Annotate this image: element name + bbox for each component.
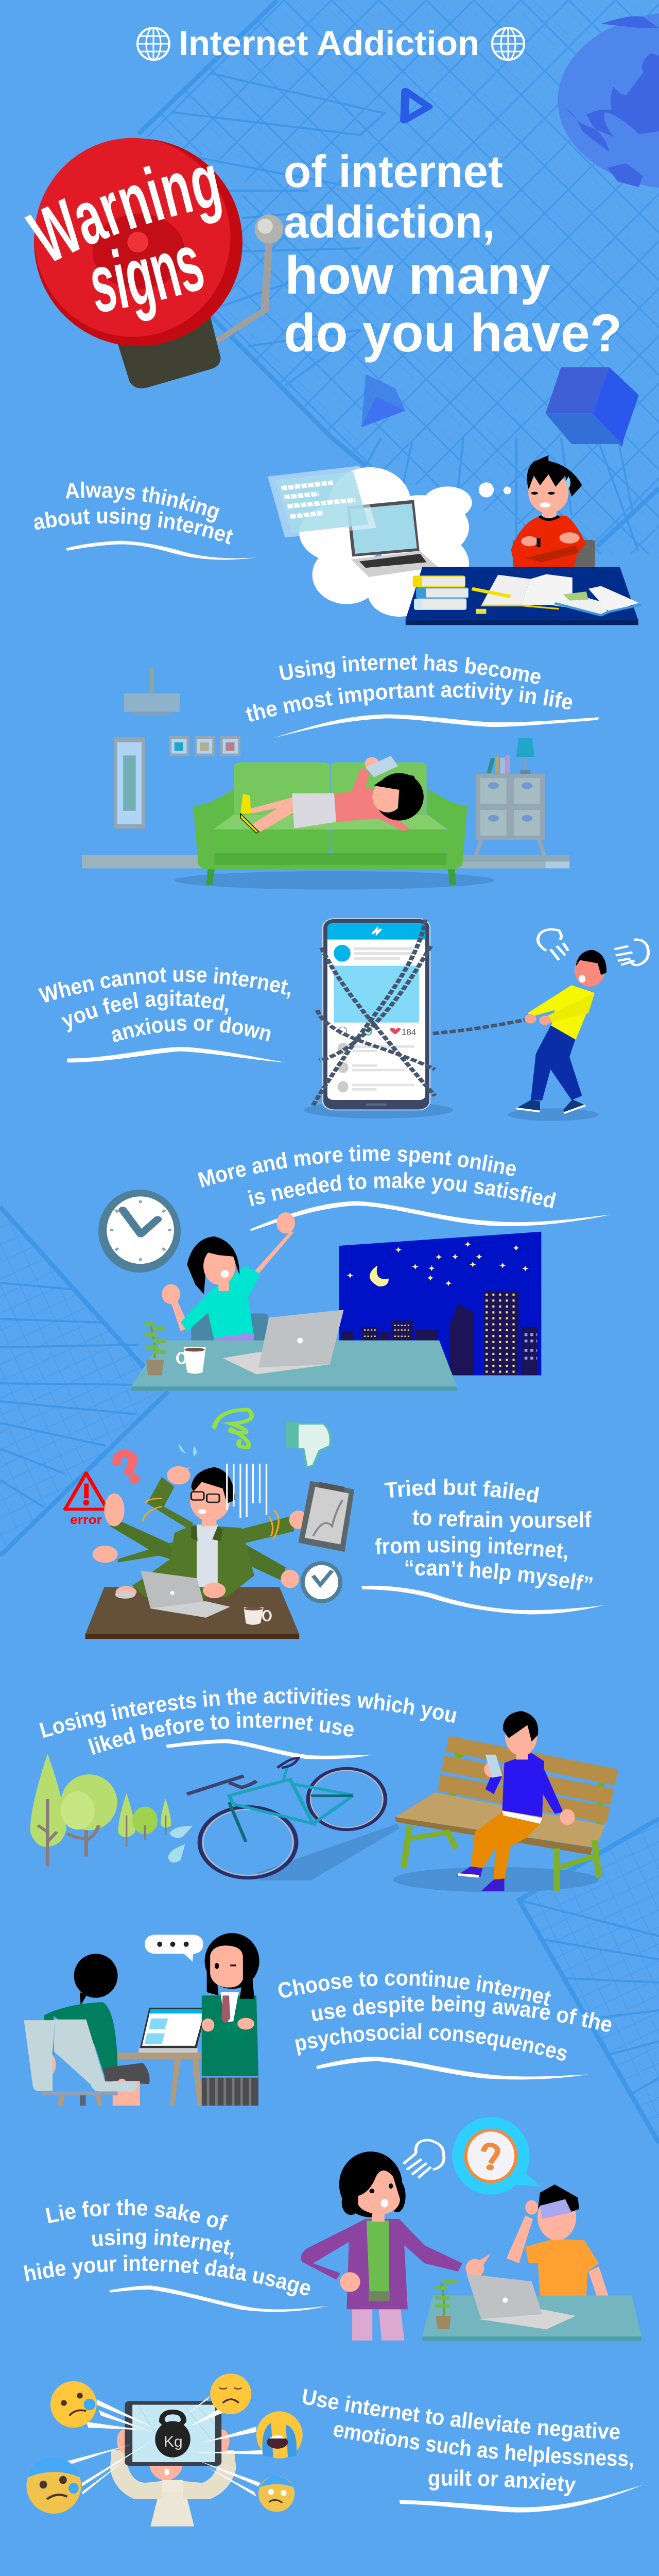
text: lie for the sake: hide your internet data usage: [24, 2255, 310, 2297]
text: cannot use: you feel agitated,: [61, 989, 229, 1032]
heading text: Internet Addiction: [179, 24, 479, 63]
text: always thinking: Always thinking: [66, 481, 219, 522]
wall clock: [98, 1190, 181, 1273]
text: lie for the sake: [22, 2195, 314, 2301]
chains around phone: [313, 920, 565, 1105]
play triangle: [404, 91, 429, 121]
emoji crying: [256, 2411, 303, 2459]
text: losing interests: liked before to internet use: [88, 1711, 354, 1755]
text: tried but failed: from using internet,: [375, 1536, 567, 1562]
text: losing interests: Losing interests in the activities which you: [39, 1687, 457, 1738]
underline 7: [316, 2057, 588, 2079]
desk: [118, 2053, 214, 2106]
mother: [301, 2151, 491, 2341]
pencil: [472, 589, 511, 597]
section 3 shapes: [67, 919, 648, 1391]
text: more time online: [195, 1141, 558, 1214]
laptop on desk: [138, 2008, 207, 2053]
section 4 shapes: [30, 1410, 619, 1892]
desk: [422, 2296, 641, 2341]
underline 8: [109, 2285, 328, 2312]
text: use internet to alleviate: [300, 2384, 634, 2498]
multi-armed man: [93, 1464, 308, 1598]
desk with plant, cup, laptop: [131, 1310, 457, 1391]
man on bench: [456, 1711, 575, 1891]
seated student: [43, 1954, 150, 2106]
text: always thinking: about using internet: [34, 507, 233, 544]
headline: of internet: [284, 146, 503, 197]
laptop: [466, 2274, 576, 2329]
floor: [82, 855, 569, 868]
bell text: Warning signs: Warning: [24, 166, 222, 261]
text: lie for the sake: Lie for the sake of: [45, 2199, 229, 2230]
background grid: right middle: [519, 1819, 659, 2143]
thought cloud: [299, 467, 511, 617]
window: [114, 737, 145, 828]
trees: [30, 1754, 171, 1867]
puff of breath: [404, 2140, 444, 2178]
sofa shadow: [175, 871, 494, 890]
picture frames: [169, 736, 240, 756]
text: choose to continue: use despite being aware of the: [311, 1995, 612, 2032]
phone like count: 184: [402, 1027, 416, 1037]
floating document: [268, 466, 376, 538]
text: most important activity: [244, 650, 575, 727]
woman on sofa with phone: [240, 756, 424, 833]
breath puffs: [538, 929, 648, 965]
night window: [339, 1232, 541, 1375]
plant: [436, 2281, 455, 2329]
polyhedron: [361, 374, 406, 427]
boy thinking: [511, 455, 586, 567]
underline 4: [250, 1201, 612, 1231]
mouse: [115, 1591, 135, 1599]
man pulling shadow: [508, 1108, 598, 1121]
title: Internet Addiction: [137, 24, 524, 63]
underline 2: [273, 715, 599, 738]
person holding tablet: [110, 2430, 236, 2527]
error triangle: [65, 1473, 107, 1509]
lever ball: [255, 214, 283, 244]
text: choose to continue: [275, 1965, 615, 2066]
globe: [558, 12, 659, 190]
text: use internet to alleviate: guilt or anxiety: [427, 2466, 577, 2498]
text: tried but failed: [374, 1475, 595, 1598]
tablet with kettlebell: [125, 2401, 221, 2466]
section 2 shapes: [66, 455, 641, 890]
underline 6: [166, 1739, 372, 1759]
underline 3: [67, 1047, 286, 1062]
headline: how many: [285, 246, 550, 306]
text: choose to continue: psychosocial consequences: [295, 2023, 567, 2061]
woman cheering: [162, 1212, 295, 1343]
text: use internet to alleviate: Use internet to alleviate negative: [303, 2388, 620, 2442]
sweat drops: [179, 1443, 197, 1456]
laptop: [141, 1571, 230, 1618]
bench shadow: [393, 1867, 599, 1892]
headline: do you have?: [284, 303, 622, 363]
phone shadow: [303, 1101, 453, 1118]
speech bubble: [145, 1935, 203, 1962]
open notebook: [481, 574, 573, 609]
bookshelf cabinet with lamp: [476, 738, 545, 855]
book stack: [413, 575, 469, 610]
sofa: [193, 762, 467, 885]
son with laptop: [507, 2184, 609, 2296]
text: choose to continue: Choose to continue internet: [278, 1970, 551, 2006]
bell text: Warning signs: signs: [92, 247, 204, 321]
ceiling lamp: [124, 668, 180, 716]
alarm lever: [216, 240, 269, 341]
text: cannot use: anxious or down: [112, 1017, 271, 1042]
text: cannot use: [37, 962, 296, 1047]
stopwatch clock: [301, 1561, 342, 1603]
alarm bell: [34, 138, 242, 346]
speech bubble clock question: [452, 2117, 541, 2195]
question mark: [117, 1453, 140, 1484]
bench: [395, 1736, 619, 1891]
cube: [546, 367, 639, 447]
background grid: top perspective: [138, 0, 659, 582]
phone: [323, 919, 430, 1110]
cup: [244, 1607, 271, 1625]
text: most important activity: the most important activity in life: [245, 682, 573, 721]
error label: error: [70, 1513, 102, 1527]
text: tried but failed: to refrain yourself: [412, 1510, 592, 1532]
emoji worried large: [26, 2458, 81, 2514]
chair: [24, 2020, 137, 2106]
section 6 shapes: [0, 2374, 659, 2576]
clipboard: [299, 1481, 354, 1552]
bicycle shadow: [256, 1824, 399, 1880]
section 5 shapes: [24, 1933, 641, 2341]
desk: [406, 567, 638, 625]
text: more time online: is needed to make you satisfied: [247, 1172, 556, 1209]
man pulling chain: [516, 950, 606, 1114]
text: more time online: More and more time spent online: [198, 1145, 516, 1188]
headline: addiction,: [284, 196, 495, 247]
emoji sad tear: [50, 2381, 97, 2428]
text: tried but failed: “can’t help myself”: [406, 1560, 593, 1591]
emotion rays: [67, 2396, 265, 2497]
underline 1: [66, 540, 257, 560]
thumbs down: [286, 1422, 331, 1467]
emoji shocked small: [258, 2476, 294, 2512]
headline: [284, 146, 622, 363]
text: cannot use: When cannot use internet,: [38, 967, 290, 1003]
underline 5: [361, 1586, 604, 1614]
bicycle: [187, 1758, 386, 1878]
text: most important activity: Using internet has become: [279, 654, 541, 684]
desk: [85, 1587, 299, 1639]
text: lie for the sake: using internet,: [92, 2229, 234, 2259]
laptop: [346, 500, 438, 577]
text: use internet to alleviate: emotions such as helplessness,: [334, 2425, 633, 2470]
background grid: left middle: [0, 1207, 168, 1556]
emoji disappointed: [210, 2374, 251, 2414]
underline 9: [399, 2485, 643, 2513]
scribble: [214, 1410, 252, 1447]
water drops: [168, 1826, 193, 1863]
kettlebell Kg label: Kg: [164, 2433, 183, 2450]
alarm base: [118, 316, 221, 388]
small open book: [555, 586, 641, 615]
text: always thinking: [31, 478, 236, 549]
text: tried but failed: Tried but failed: [384, 1479, 540, 1503]
bell text: Warning signs: [18, 138, 228, 330]
standing student: [202, 1933, 259, 2106]
eraser: [476, 609, 486, 614]
icon: right globe: [492, 28, 524, 60]
chair: [513, 540, 595, 568]
section 1 shapes: [34, 12, 659, 447]
icon: left globe: [137, 28, 169, 60]
